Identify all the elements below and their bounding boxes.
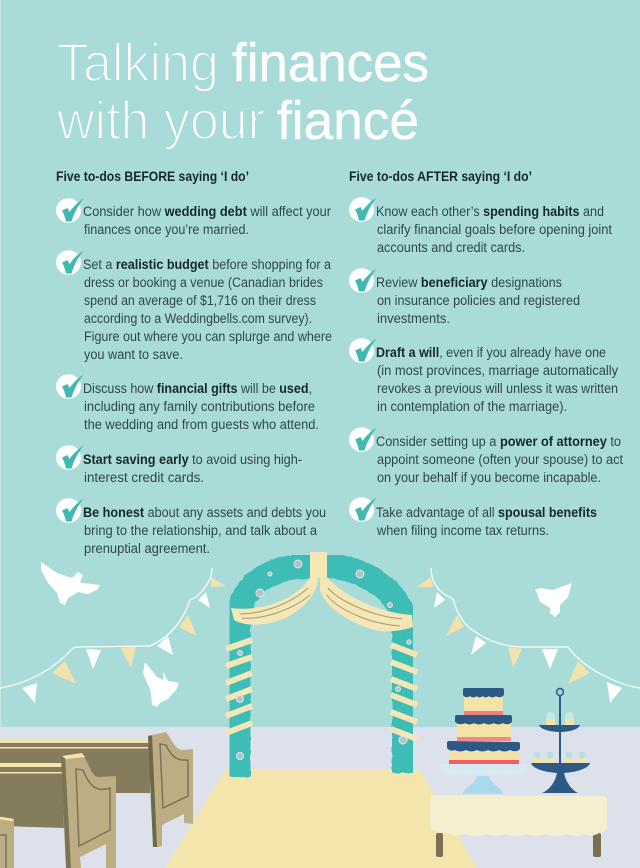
item: beneficiary: investments.	[377, 311, 450, 326]
item: be honest	[56, 498, 326, 556]
item: spousal benefits	[349, 497, 597, 538]
right column heading: Five to-dos AFTER saying ‘I do’	[349, 169, 532, 184]
item: power of attorney: Consider setting up a power of attorney to	[376, 434, 621, 449]
right column stripes	[391, 645, 417, 739]
item: realistic budget: spend an average of $1,716 on their dress	[84, 293, 316, 308]
item: wedding debt	[56, 198, 331, 237]
left list	[56, 198, 332, 556]
wedding arch	[226, 552, 417, 777]
cupcakes	[533, 712, 586, 763]
item: spending habits: accounts and credit cards.	[377, 240, 525, 255]
title: fiancé	[277, 91, 419, 151]
item: beneficiary: on insurance policies and registered	[377, 293, 580, 308]
item: financial gifts: including any family contributions before	[84, 399, 315, 414]
front pew	[0, 753, 116, 868]
item: draft a will: (in most provinces, marriage automatically	[377, 363, 618, 378]
item: draft a will: Draft a will, even if you already have one	[376, 345, 606, 360]
item: realistic budget: according to a Weddingbells.com survey).	[84, 311, 312, 326]
title: finances	[232, 33, 429, 93]
right bunting	[417, 568, 640, 703]
item: power of attorney: appoint someone (often your spouse) to act	[377, 452, 623, 467]
title: with your	[56, 91, 265, 151]
third pew	[0, 818, 14, 868]
item: draft a will	[349, 338, 618, 414]
item: realistic budget: you want to save.	[84, 347, 183, 362]
dove left bottom	[143, 662, 179, 707]
item: saving early	[56, 445, 302, 485]
item: financial gifts: the wedding and from guests who attend.	[84, 417, 319, 432]
item: draft a will: revokes a previous will unless it was written	[377, 381, 618, 396]
item: beneficiary: Review beneficiary designations	[376, 275, 562, 290]
title	[56, 33, 429, 151]
table	[430, 795, 607, 857]
item: be honest: bring to the relationship, and talk about a	[84, 523, 317, 538]
back pew	[0, 732, 193, 847]
title: Talking	[57, 33, 219, 93]
item: be honest: prenuptial agreement.	[84, 541, 210, 556]
item: power of attorney: on your behalf if you become incapable.	[377, 470, 601, 485]
left bunting	[0, 568, 226, 703]
item: spending habits: clarify financial goals before opening joint	[377, 222, 612, 237]
item: power of attorney	[349, 427, 623, 485]
item: spending habits: Know each other’s spending habits and	[376, 204, 604, 219]
item: beneficiary	[349, 268, 580, 326]
item: financial gifts: Discuss how financial gifts will be used,	[83, 381, 312, 396]
item: spousal benefits: Take advantage of all spousal benefits	[376, 505, 597, 520]
item: realistic budget	[56, 250, 332, 362]
left column stripes	[226, 640, 252, 733]
aisle carpet	[165, 770, 477, 868]
item: be honest: Be honest about any assets and debts you	[83, 505, 326, 520]
item: draft a will: in contemplation of the marriage).	[377, 399, 567, 414]
floor	[0, 727, 640, 868]
roses	[236, 560, 411, 760]
left column heading: Five to-dos BEFORE saying ‘I do’	[56, 169, 249, 184]
item: financial gifts	[56, 374, 319, 432]
item: saving early: interest credit cards.	[84, 470, 204, 485]
dove right	[535, 583, 572, 617]
item: spending habits	[349, 197, 612, 255]
item: spousal benefits: when filing income tax returns.	[376, 523, 549, 538]
item: wedding debt: Consider how wedding debt will affect your	[83, 204, 331, 219]
item: realistic budget: Figure out where you can splurge and where	[84, 329, 332, 344]
right drape	[320, 577, 413, 631]
left drape	[231, 578, 318, 625]
cupcake stand	[531, 688, 590, 793]
dove left top	[41, 562, 100, 605]
right list	[349, 197, 623, 538]
item: saving early: Start saving early to avoid using high-	[83, 452, 302, 467]
cake	[441, 688, 527, 794]
cake stand	[463, 776, 503, 794]
item: realistic budget: dress or booking a venue (Canadian brides	[84, 275, 323, 290]
item: realistic budget: Set a realistic budget before shopping for a	[83, 257, 331, 272]
item: wedding debt: finances once you’re married.	[84, 222, 249, 237]
